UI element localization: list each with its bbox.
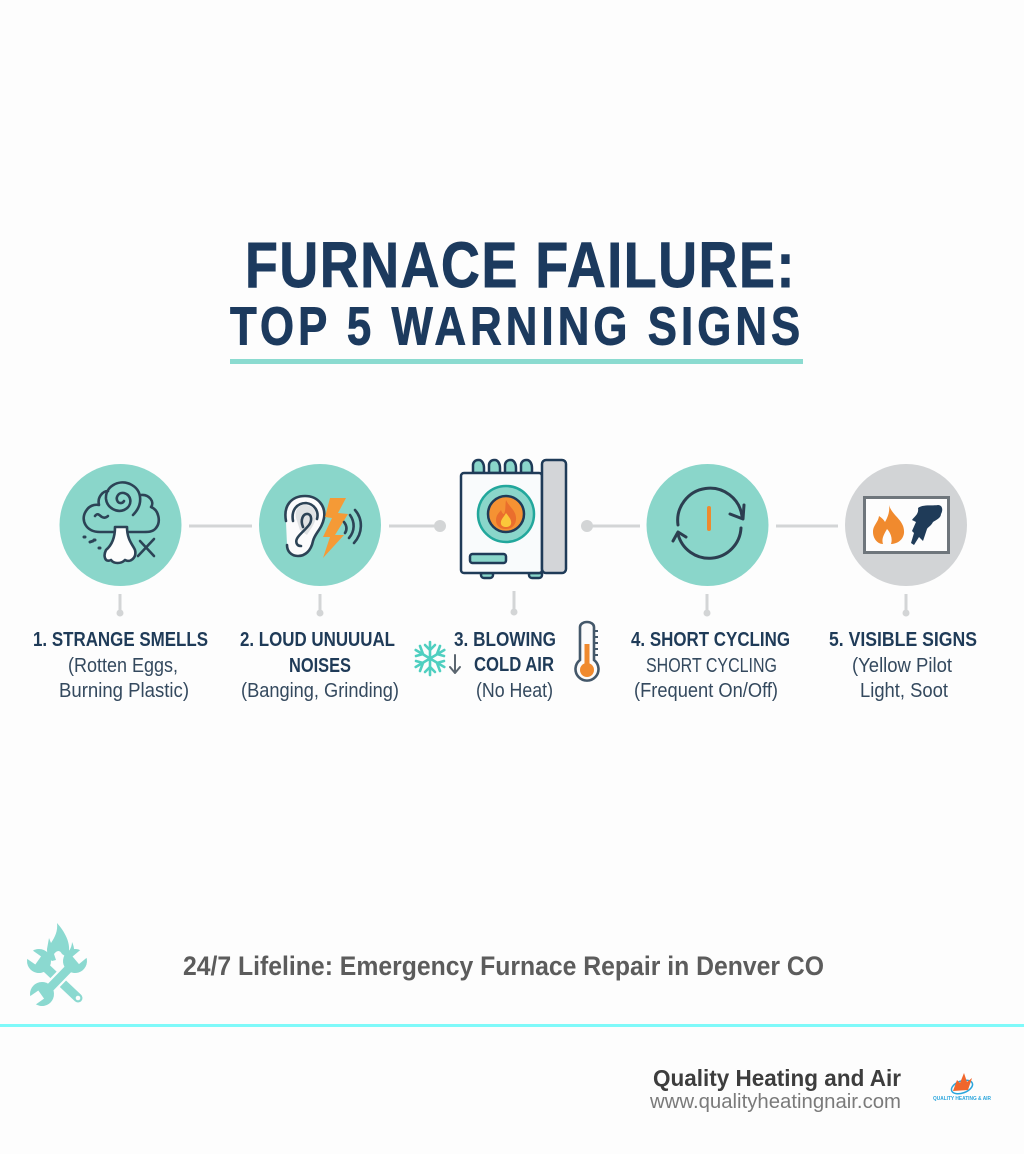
label 5: 5. VISIBLE SIGNS (829, 628, 977, 651)
label 1: 1. STRANGE SMELLS (33, 628, 208, 651)
label 1 (33, 628, 208, 702)
icon: snowflake (416, 642, 444, 675)
label 4 (631, 628, 790, 702)
label 2 (240, 628, 399, 702)
label 2: 2. LOUD UNUUUAL (240, 628, 395, 651)
company logo: QUALITY HEATING & AIR (933, 1096, 991, 1102)
label 2: (Banging, Grinding) (241, 680, 399, 702)
label 5: Light, Soot (860, 680, 948, 702)
icon: down arrow (450, 655, 460, 673)
label 4: SHORT CYCLING (646, 655, 777, 677)
icon: loud noises circle (259, 464, 381, 586)
company name: Quality Heating and Air (653, 1065, 901, 1091)
label 2: NOISES (289, 654, 351, 677)
label 1: Burning Plastic) (59, 680, 189, 702)
icon: short cycling circle (646, 464, 768, 586)
label 4: (Frequent On/Off) (634, 680, 778, 702)
label 4: 4. SHORT CYCLING (631, 628, 790, 651)
icon: wrenches and flame (21, 923, 93, 1012)
icon: visible signs circle (845, 464, 967, 586)
title underline (230, 359, 803, 364)
icon: thermometer (576, 622, 599, 681)
company url: www.qualityheatingnair.com (649, 1091, 901, 1113)
footer divider (0, 1024, 1024, 1027)
label 3: 3. BLOWING (454, 628, 556, 651)
label 3 (454, 628, 556, 702)
title: FURNACE FAILURE: (245, 229, 794, 301)
title: TOP 5 WARNING SIGNS (230, 297, 800, 357)
icon: strange smells circle (60, 464, 182, 586)
title (230, 229, 800, 357)
label 5 (829, 628, 977, 702)
company logo (933, 1073, 991, 1102)
label 1: (Rotten Eggs, (68, 655, 178, 677)
label 3: (No Heat) (476, 680, 553, 702)
label 3: COLD AIR (474, 653, 554, 676)
footer headline: 24/7 Lifeline: Emergency Furnace Repair in Denver CO (183, 951, 824, 981)
label 5: (Yellow Pilot (852, 655, 952, 677)
icon: furnace (461, 460, 566, 578)
